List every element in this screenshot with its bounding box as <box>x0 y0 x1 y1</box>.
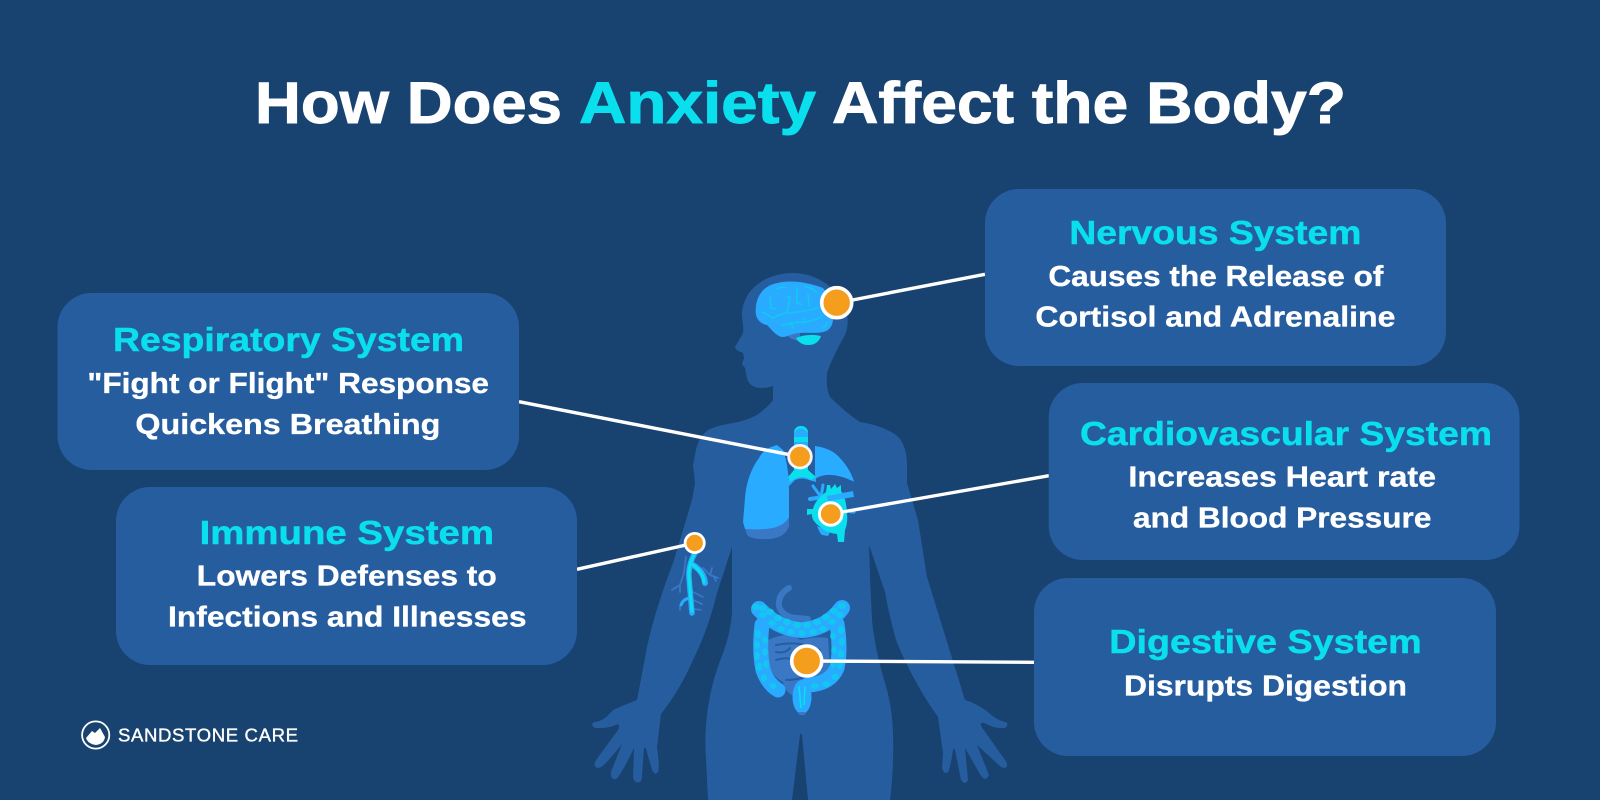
panel: immune system <box>116 487 577 665</box>
panel: cardiovascular system: and Blood Pressure <box>1133 503 1431 535</box>
panel: nervous system: Cortisol and Adrenaline <box>1035 302 1395 334</box>
panel: cardiovascular system <box>1049 383 1520 560</box>
marker: cardiovascular system <box>819 503 842 525</box>
logo: Sandstone Care <box>82 721 298 749</box>
panel: nervous system <box>985 189 1446 366</box>
panel: immune system: Infections and Illnesses <box>168 602 526 634</box>
panel: nervous system: Causes the Release of <box>1048 261 1384 293</box>
connector lines <box>519 274 1049 662</box>
title: Affect the Body? <box>832 71 1346 136</box>
marker: digestive system <box>792 646 822 676</box>
panel: cardiovascular system: Increases Heart rate <box>1128 462 1436 494</box>
icon: lungs and trachea <box>743 426 854 539</box>
panel: digestive system: Digestive System <box>1109 624 1422 661</box>
panel: immune system: Immune System <box>200 515 494 552</box>
logo: Sandstone Care: SANDSTONE CARE <box>118 725 298 746</box>
title: Anxiety <box>579 71 816 136</box>
panel: immune system: Lowers Defenses to <box>197 561 497 593</box>
icon: arm blood vessels <box>672 553 718 613</box>
marker: immune system <box>685 533 704 553</box>
icon: intestines <box>752 588 846 715</box>
panel: respiratory system: Quickens Breathing <box>135 409 440 441</box>
icon: heart <box>807 484 854 542</box>
panel: digestive system <box>1034 578 1496 756</box>
panel: cardiovascular system: Cardiovascular System <box>1080 416 1492 453</box>
panel: digestive system: Disrupts Digestion <box>1124 671 1407 703</box>
icon: brain <box>756 282 833 345</box>
panel: respiratory system <box>58 293 519 470</box>
panel: nervous system: Nervous System <box>1069 215 1361 252</box>
panel: respiratory system: Respiratory System <box>113 322 464 359</box>
marker: respiratory system <box>789 445 811 468</box>
human body silhouette <box>592 273 1008 800</box>
panel: respiratory system: "Fight or Flight" Response <box>87 368 489 400</box>
marker: nervous system <box>822 288 852 318</box>
title <box>255 71 1346 136</box>
title: How Does <box>255 71 562 136</box>
